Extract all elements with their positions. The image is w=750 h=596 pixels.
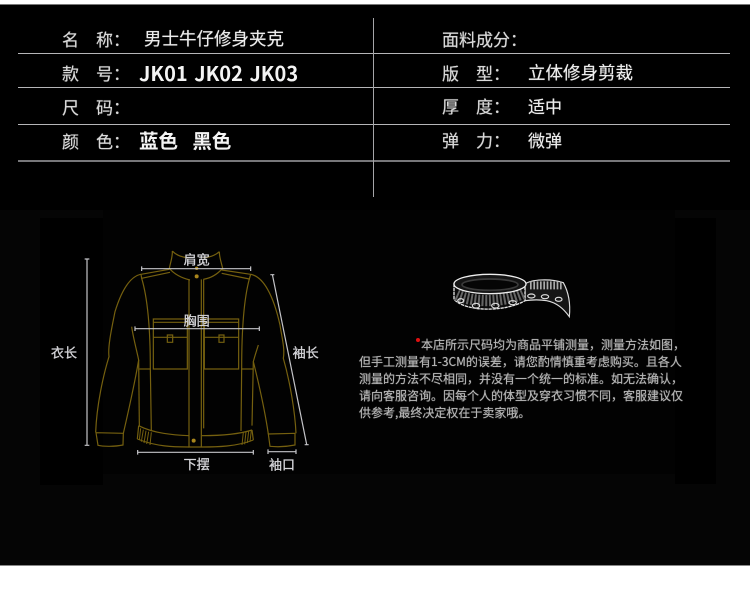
placket <box>189 279 204 447</box>
measurement labels: 胸围 <box>184 310 210 329</box>
specification table <box>18 18 730 197</box>
row: fabric label: 面料成分： <box>442 26 527 51</box>
row: color label part two: 色： <box>96 128 130 153</box>
measurement labels: 下摆 <box>184 454 210 473</box>
buttons <box>192 267 199 443</box>
row: color label: 颜 <box>62 128 79 153</box>
note line 4: 请向客服咨询。因每个人的体型及穿衣习惯不同，客服建议仅 <box>359 387 683 404</box>
note line 3: 测量的方法不尽相同，并没有一个统一的标准。如无法确认， <box>359 370 683 387</box>
row: name label part two: 称： <box>96 26 130 51</box>
size note text <box>416 338 420 342</box>
note line 1: 本店所示尺码均为商品平铺测量，测量方法如图， <box>421 336 685 353</box>
row: fit label part two: 型： <box>476 60 510 85</box>
row: size label part two: 码： <box>96 94 130 119</box>
left half <box>96 251 190 447</box>
measurement labels <box>51 250 319 474</box>
jacket outline <box>96 251 296 447</box>
row: name label: 名 <box>62 26 79 51</box>
measurement labels: 袖口 <box>269 455 295 474</box>
note line 5: 供参考,最终决定权在于卖家哦。 <box>359 404 530 421</box>
measurement labels: 肩宽 <box>184 250 210 269</box>
row: style number value: JK01 JK02 JK03 <box>139 58 298 87</box>
row: style number label part two: 号： <box>96 60 130 85</box>
row: fit value: 立体修身剪裁 <box>528 60 633 85</box>
row: color value: 蓝色 黑色 <box>139 125 231 154</box>
row: thickness value: 适中 <box>528 93 562 118</box>
row: stretch label part two: 力： <box>476 127 510 152</box>
row: name value: 男士牛仔修身夹克 <box>144 26 284 51</box>
measurement lines <box>85 259 309 455</box>
row: fit label: 版 <box>442 60 459 85</box>
left pocket <box>153 319 187 369</box>
note line 2: 但手工测量有1-3CM的误差，请您酌情慎重考虑购买。且各人 <box>359 353 682 370</box>
measurement labels: 衣长 <box>51 343 77 362</box>
row: stretch label: 弹 <box>442 127 459 152</box>
red asterisk <box>416 338 420 342</box>
right half <box>202 252 296 447</box>
measurement labels: 袖长 <box>293 343 319 362</box>
right pocket <box>204 319 239 369</box>
row: style number label: 款 <box>62 60 79 85</box>
icon: measuring tape <box>454 274 570 317</box>
row: thickness label part two: 度： <box>476 93 510 118</box>
row: size label: 尺 <box>62 94 79 119</box>
row: stretch value: 微弹 <box>528 127 562 152</box>
jacket measurement diagram <box>51 250 319 474</box>
row: thickness label: 厚 <box>442 93 459 118</box>
